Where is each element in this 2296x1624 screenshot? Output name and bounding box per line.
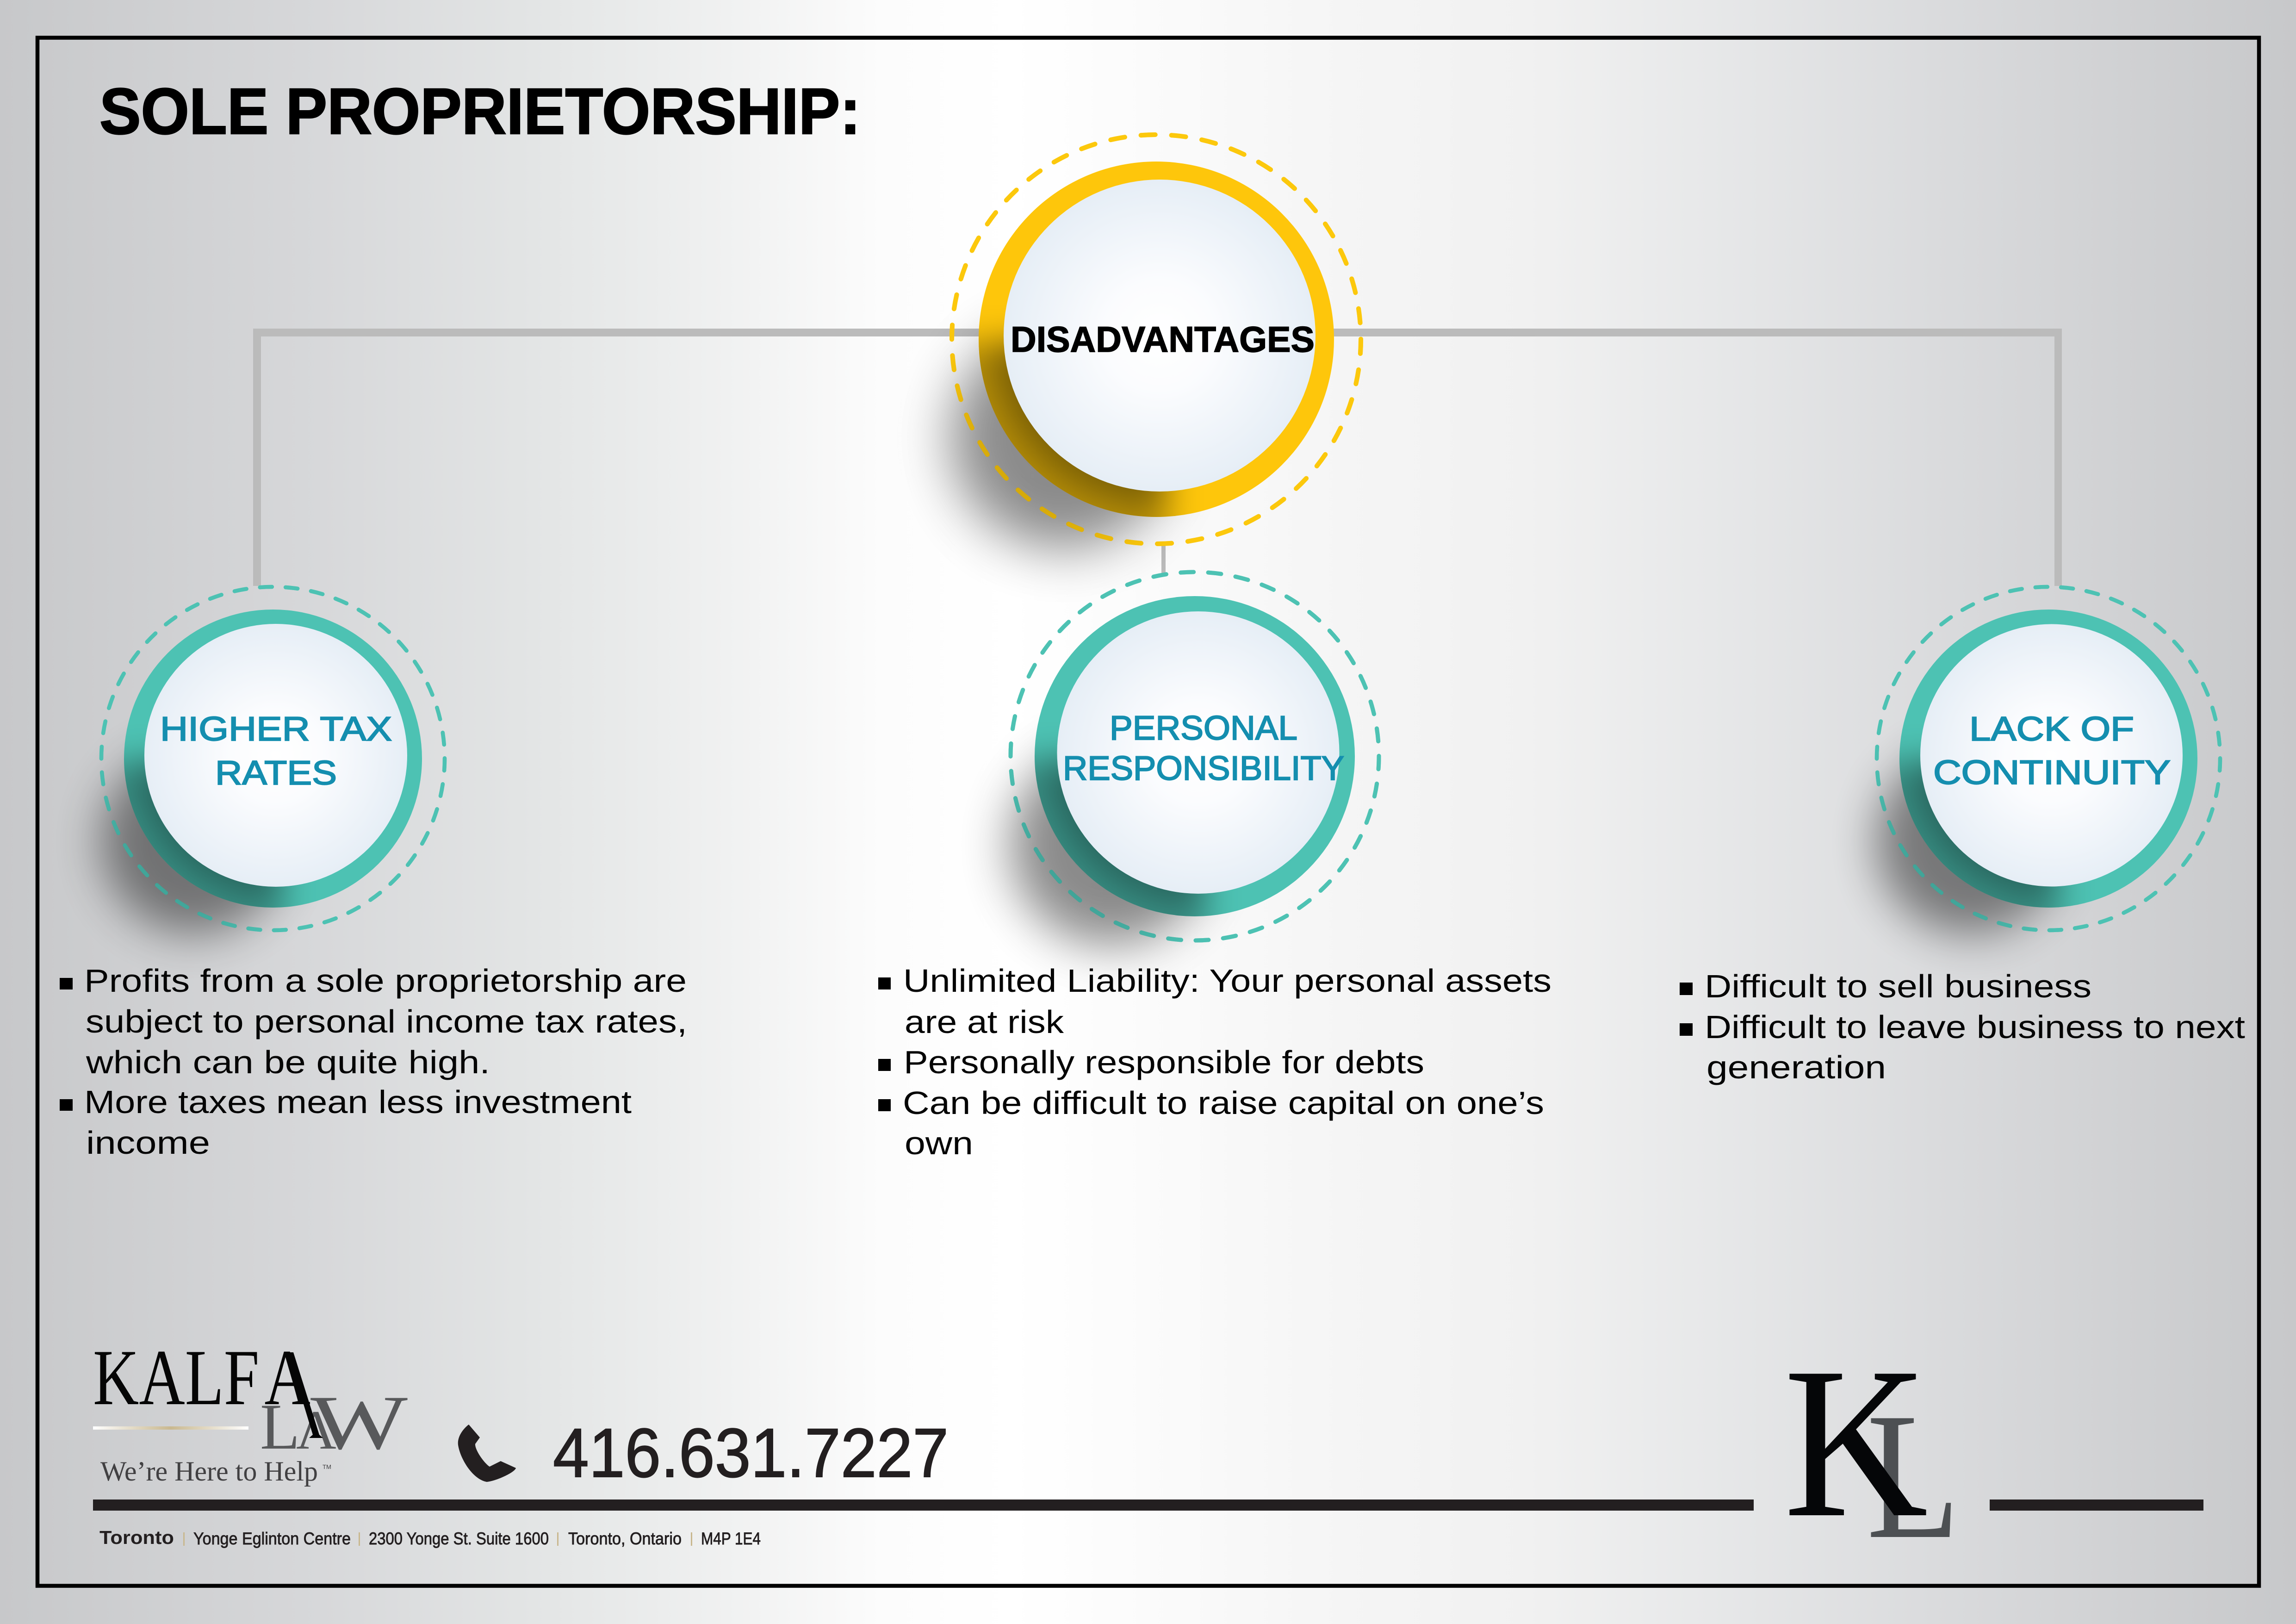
panel: personal responsibility circle [965, 572, 1379, 986]
address: Yonge Eglinton Centre [193, 1529, 351, 1548]
text block: lack of continuity bullets [1680, 968, 2245, 1085]
panel: higher tax rates circle [55, 587, 445, 977]
text block: lack of continuity bullets: generation [1706, 1049, 1886, 1085]
text block: higher tax rates bullets: More taxes mean less investment [84, 1084, 632, 1120]
text block: personal responsibility bullets: own [905, 1125, 973, 1161]
logo: Kalfa Law wordmark [93, 1333, 408, 1466]
logo: Kalfa Law wordmark: L [260, 1391, 300, 1463]
tagline: We’re Here to Help [100, 1456, 318, 1487]
text block: higher tax rates bullets: Profits from a sole proprietorship are [84, 963, 687, 999]
connector lines [253, 329, 2062, 586]
logo: KL monogram: L [1867, 1375, 1960, 1576]
heading: lack of continuity: LACK OF [1969, 710, 2134, 748]
logo: Kalfa Law wordmark: W [310, 1380, 408, 1466]
text block: lack of continuity bullets: Difficult to sell business [1705, 968, 2091, 1004]
text block: higher tax rates bullets: income [86, 1125, 210, 1161]
text block: higher tax rates bullets: which can be quite high. [86, 1044, 490, 1080]
address: Toronto, Ontario [568, 1529, 682, 1548]
heading: personal responsibility: PERSONAL [1110, 709, 1297, 747]
heading: higher tax rates: HIGHER TAX [160, 710, 392, 748]
address: Toronto [99, 1527, 174, 1548]
text block: higher tax rates bullets [60, 963, 687, 1161]
text block: personal responsibility bullets: are at risk [905, 1004, 1064, 1040]
title: SOLE PROPRIETORSHIP: [99, 75, 861, 148]
logo: Kalfa Law wordmark: Λ [296, 1399, 336, 1461]
text block: personal responsibility bullets: Personally responsible for debts [904, 1044, 1424, 1080]
address: M4P 1E4 [701, 1529, 761, 1548]
address: 2300 Yonge St. Suite 1600 [369, 1529, 549, 1548]
logo: KL monogram: K [1784, 1323, 1928, 1562]
heading: personal responsibility: RESPONSIBILITY [1063, 750, 1344, 787]
phone number: 416.631.7227 [553, 1414, 949, 1492]
text block: personal responsibility bullets: Unlimited Liability: Your personal assets [903, 963, 1551, 999]
text block: lack of continuity bullets: Difficult to leave business to next [1705, 1009, 2245, 1045]
heading: personal responsibility [1063, 709, 1344, 787]
icon: phone [458, 1425, 516, 1482]
heading: lack of continuity [1933, 710, 2171, 791]
heading: disadvantages: DISADVANTAGES [1011, 319, 1315, 360]
heading: higher tax rates: RATES [215, 754, 337, 792]
text block: personal responsibility bullets: Can be difficult to raise capital on one’s [903, 1085, 1544, 1121]
address [99, 1527, 761, 1548]
heading: higher tax rates [160, 710, 392, 792]
heading: lack of continuity: CONTINUITY [1933, 754, 2171, 791]
text block: higher tax rates bullets: subject to personal income tax rates, [86, 1003, 687, 1039]
panel: lack of continuity circle [1830, 587, 2220, 977]
tagline: TM [323, 1463, 331, 1470]
text block: personal responsibility bullets [878, 963, 1551, 1161]
panel: disadvantages circle [909, 135, 1361, 586]
logo: Kalfa Law wordmark: KALFA [93, 1333, 310, 1422]
footer rules [93, 1500, 2203, 1511]
